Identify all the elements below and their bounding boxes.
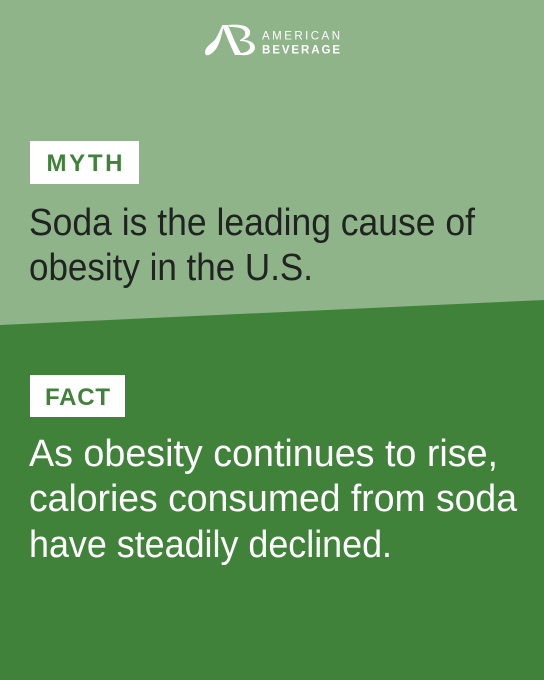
- icon: AB monogram: [205, 25, 255, 55]
- logo: American Beverage: [205, 25, 340, 56]
- label box: [30, 141, 139, 184]
- myth line 1: Soda is the leading cause of: [29, 202, 475, 244]
- myth statement: [29, 202, 475, 289]
- fact label: [30, 375, 125, 417]
- logo text: American: AMERICAN: [262, 30, 340, 42]
- label text: MYTH: [46, 150, 122, 177]
- fact statement: [29, 433, 518, 566]
- fact line 1: As obesity continues to rise,: [29, 433, 498, 475]
- logo text: Beverage: BEVERAGE: [262, 44, 340, 56]
- myth line 2: obesity in the U.S.: [29, 247, 313, 289]
- panel: fact background: [0, 300, 544, 680]
- myth label: [30, 141, 139, 184]
- fact line 3: have steadily declined.: [29, 524, 392, 566]
- fact line 2: calories consumed from soda: [29, 478, 518, 520]
- label text: FACT: [45, 384, 110, 411]
- label box: [30, 375, 125, 417]
